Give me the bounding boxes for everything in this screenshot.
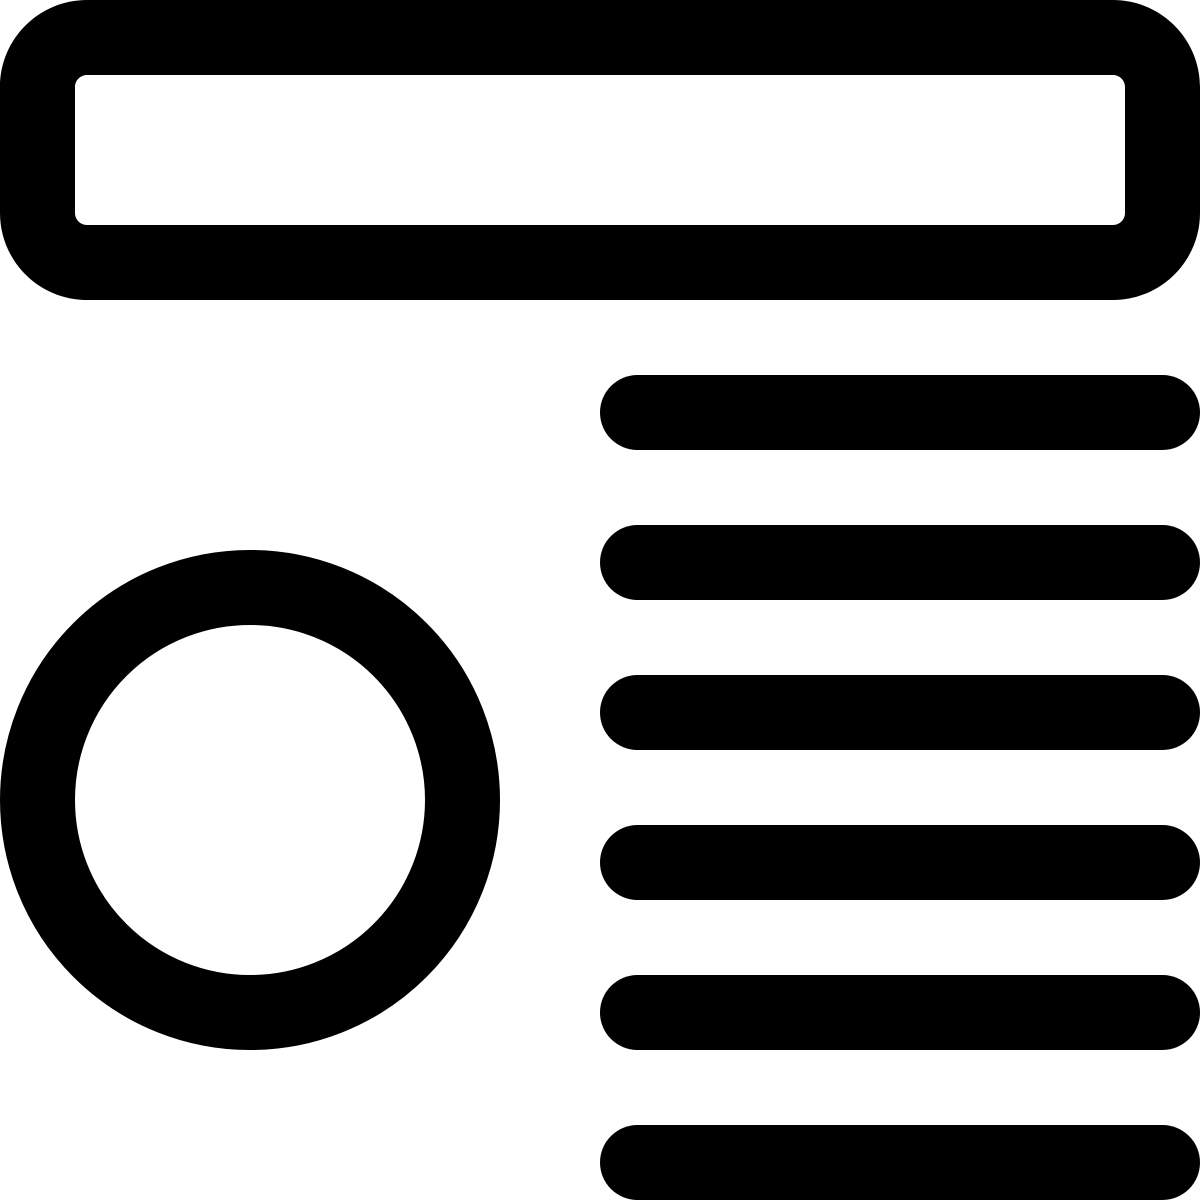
text lines: [600, 375, 1200, 1200]
text line 5: [600, 975, 1200, 1050]
circle outline: [38, 588, 462, 1012]
text line 1: [600, 375, 1200, 450]
text line 2: [600, 525, 1200, 600]
text line 6: [600, 1125, 1200, 1200]
text line 4: [600, 825, 1200, 900]
header box: [0, 0, 1200, 300]
text line 3: [600, 675, 1200, 750]
